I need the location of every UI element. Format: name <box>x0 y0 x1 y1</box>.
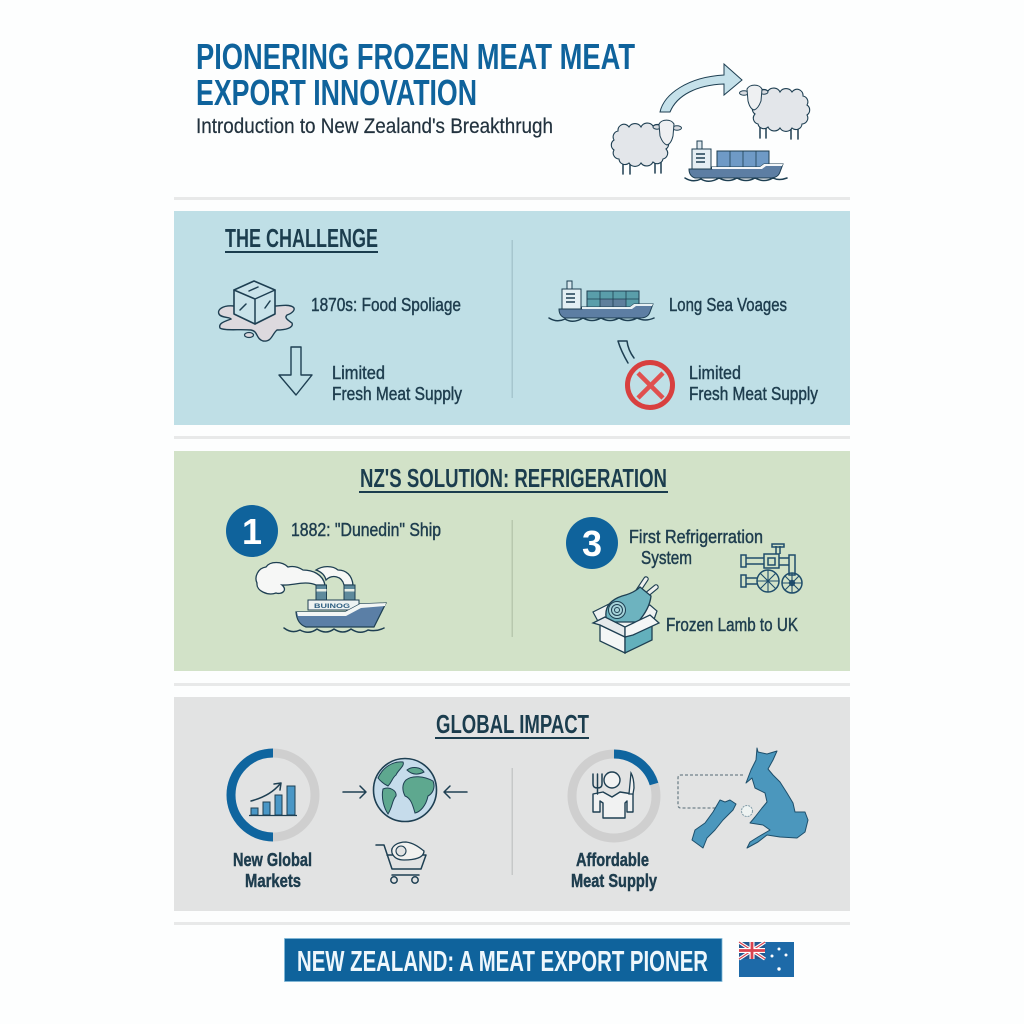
text: new global markets: New Global <box>233 849 312 870</box>
chart: half donut with growth bars <box>231 753 315 837</box>
badge: number 1: 1 <box>242 511 262 552</box>
icon: globe <box>374 758 436 822</box>
panel: the challenge <box>174 211 850 425</box>
text: food spoilage: 1870s: Food Spoliage <box>311 294 461 315</box>
badge: number 3: 3 <box>582 523 602 564</box>
icon: new zealand flag <box>739 942 794 977</box>
footer banner: NEW ZEALAND: A MEAT EXPORT PIONER <box>297 946 708 978</box>
heading: nz's solution: NZ'S SOLUTION: REFRIGERATION <box>360 463 667 493</box>
text: limited fresh meat supply: Fresh Meat Supply <box>689 383 819 404</box>
text: affordable meat supply: Affordable <box>576 849 649 870</box>
text: first refrigeration system <box>629 526 763 568</box>
heading: global impact: GLOBAL IMPACT <box>436 709 589 739</box>
text: limited fresh meat supply <box>689 362 819 404</box>
text: new global markets: Markets <box>245 870 301 891</box>
icon: sheep right <box>740 85 810 139</box>
text: frozen lamb to uk: Frozen Lamb to UK <box>666 614 799 635</box>
badge: number 3 <box>566 517 618 569</box>
text: limited fresh meat supply: Fresh Meat Supply <box>332 383 463 404</box>
icon: container ship <box>549 281 654 321</box>
title <box>196 36 635 113</box>
heading: the challenge: THE CHALLENGE <box>225 223 378 253</box>
icon: curved export arrow <box>660 64 742 112</box>
icon: shopping cart with meat <box>376 842 426 883</box>
text: limited fresh meat supply: Limited <box>689 362 741 383</box>
text: long sea voyages: Long Sea Voages <box>669 294 787 315</box>
icon: down arrow <box>279 347 312 395</box>
chart: donut with diner icon <box>572 754 656 838</box>
icon: steam ship: BUINOG <box>314 604 350 610</box>
icon: red cross <box>628 362 672 408</box>
title: EXPORT INNOVATION <box>196 72 477 113</box>
text: affordable meat supply: Meat Supply <box>571 870 658 891</box>
footer banner <box>284 938 722 982</box>
arrow: into globe from right <box>444 786 467 798</box>
text: affordable meat supply <box>571 849 658 891</box>
icon: container ship <box>685 141 787 181</box>
subtitle: Introduction to New Zealand's Breakthrugh <box>196 115 553 138</box>
text: first refrigeration system: System <box>641 547 692 568</box>
panel: nz's solution <box>174 451 850 671</box>
text: limited fresh meat supply <box>332 362 463 404</box>
text: first refrigeration system: First Refrigerration <box>629 526 763 547</box>
icon: curved arrow tail <box>618 341 634 363</box>
panel: global impact <box>174 697 850 911</box>
icon: steam ship <box>256 562 386 632</box>
text: limited fresh meat supply: Limited <box>332 362 385 383</box>
title: PIONERING FROZEN MEAT MEAT <box>196 36 635 77</box>
map: new zealand and uk <box>678 748 808 848</box>
icon: frozen lamb in box <box>593 579 659 653</box>
icon: sheep left <box>611 120 682 174</box>
icon: refrigeration machine <box>741 544 802 593</box>
header <box>196 36 810 181</box>
text: dunedin ship: 1882: "Dunedin" Ship <box>291 519 441 540</box>
badge: number 1 <box>226 505 278 557</box>
text: new global markets <box>233 849 312 891</box>
icon: melting ice cube <box>219 281 294 341</box>
arrow: into globe from left <box>343 786 366 798</box>
